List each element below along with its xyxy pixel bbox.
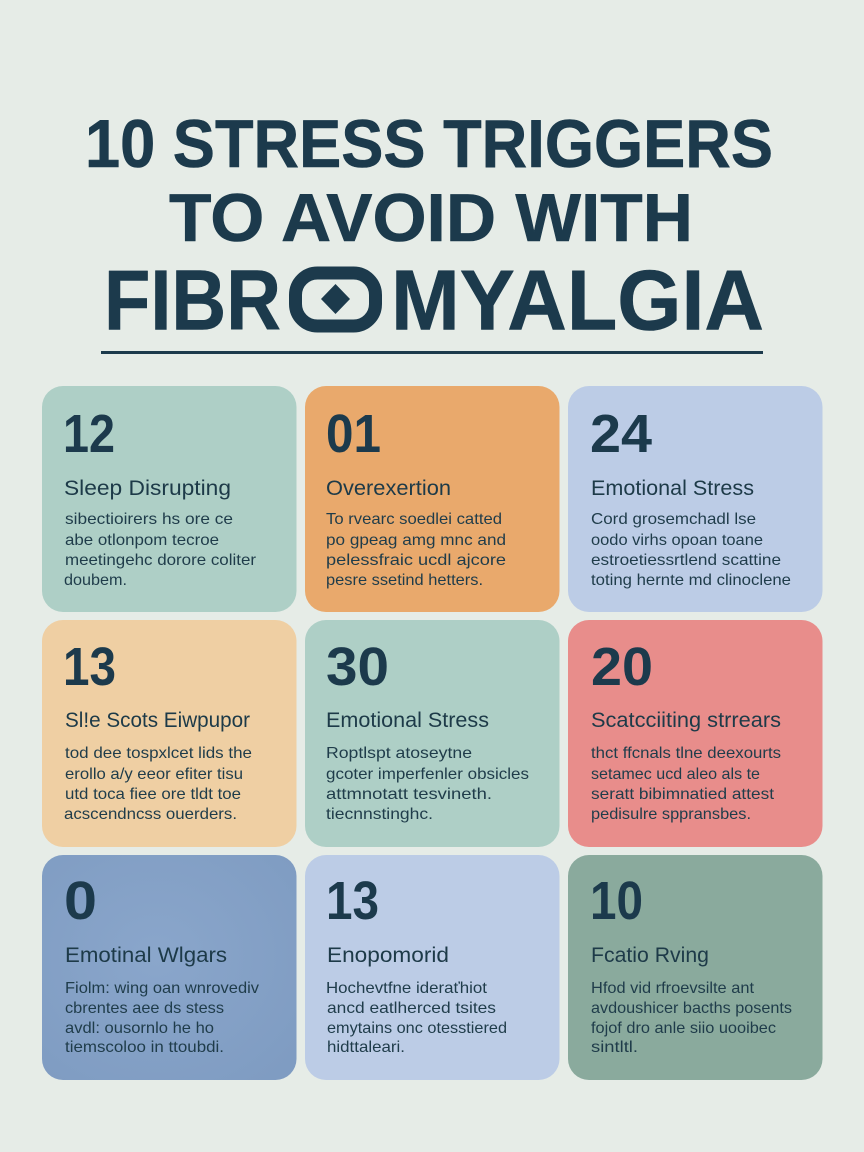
panel: 24 Emotional Stress: toting hernte md clinoclene bbox=[591, 572, 791, 589]
panel: 0 Emotinal Wlgars: cbrentes aee ds stess bbox=[65, 1000, 224, 1017]
panel: 0 Emotinal Wlgars: avdl: ousornlo he ho bbox=[65, 1020, 214, 1037]
panel: 0 Emotinal Wlgars: tiemscoloo in ttoubdi. bbox=[65, 1039, 224, 1056]
panel: 30 Emotional Stress: attmnotatt tesvineth. bbox=[326, 786, 492, 803]
title: FIBR bbox=[104, 254, 281, 348]
panel: 13 Enopomorid: 13 bbox=[326, 871, 379, 931]
panel: 10 Fcatio Rving: 10 bbox=[590, 871, 643, 931]
panel: 12 Sleep Disrupting: 12 bbox=[63, 404, 115, 464]
panel: 12 Sleep Disrupting: sibectioirers hs ore ce bbox=[65, 511, 233, 528]
title: TO AVOID WITH bbox=[169, 180, 693, 256]
panel: 24 Emotional Stress: Emotional Stress bbox=[591, 476, 754, 500]
panel: 12 Sleep Disrupting: Sleep Disrupting bbox=[64, 476, 231, 500]
panel: 0 Emotinal Wlgars: Fiolm: wing oan wnrovediv bbox=[65, 980, 259, 997]
panel: 10 Fcatio Rving: fojof dro anle siio uooibec bbox=[591, 1020, 776, 1037]
panel: 20 Scatcciiting strrears: seratt bibimnatied attest bbox=[591, 786, 775, 803]
panel: 13 Sl!e Scots Eiwpupor: erollo a/y eeor efiter tisu bbox=[65, 766, 243, 783]
panel: 01 Overexertion: To rvearc soedlei catted bbox=[326, 511, 502, 528]
panel: 13 Sl!e Scots Eiwpupor: utd toca fiee ore tldt toe bbox=[65, 786, 241, 803]
panel: 20 Scatcciiting strrears: pedisulre sppransbes. bbox=[591, 806, 751, 823]
panel: 13 Sl!e Scots Eiwpupor: Sl!e Scots Eiwpupor bbox=[65, 708, 250, 732]
panel: 20 Scatcciiting strrears: setamec ucd aleo als te bbox=[591, 766, 760, 783]
panel: 20 Scatcciiting strrears: 20 bbox=[591, 637, 653, 697]
panel: 13 Enopomorid: Enopomorid bbox=[327, 943, 449, 967]
panel: 01 Overexertion: po gpeag amg mnc and bbox=[326, 532, 506, 549]
panel: 01 Overexertion: pelessfraic ucdl ajcore bbox=[326, 552, 506, 569]
panel: 12 Sleep Disrupting: abe otlonpom tecroe bbox=[65, 532, 219, 549]
panel: 10 Fcatio Rving: avdoushicer bacths posents bbox=[591, 1000, 792, 1017]
panel: 01 Overexertion: 01 bbox=[326, 404, 381, 464]
icon: stylised O with diamond bbox=[296, 273, 376, 326]
panel: 0 Emotinal Wlgars: 0 bbox=[64, 871, 97, 931]
panel: 13 Enopomorid: ancd eatlherced tsites bbox=[327, 1000, 496, 1017]
panel: 20 Scatcciiting strrears: thct ffcnals tlne deexourts bbox=[591, 745, 781, 762]
panel: 10 Fcatio Rving: Hfod vid rfroevsilte ant bbox=[591, 980, 755, 997]
panel: 30 Emotional Stress: gcoter imperfenler obsicles bbox=[326, 766, 529, 783]
panel: 30 Emotional Stress: Roptlspt atoseytne bbox=[326, 745, 472, 762]
panel: 13 Enopomorid: emytains onc otesstiered bbox=[327, 1020, 507, 1037]
panel: 12 Sleep Disrupting: doubem. bbox=[64, 572, 127, 589]
panel: 0 Emotinal Wlgars bbox=[42, 855, 296, 1080]
panel: 01 Overexertion: Overexertion bbox=[326, 476, 451, 500]
panel: 01 Overexertion bbox=[305, 386, 560, 612]
panel: 12 Sleep Disrupting: meetingehc dorore coliter bbox=[65, 552, 257, 569]
panel: 24 Emotional Stress bbox=[568, 386, 822, 612]
panel: 10 Fcatio Rving: sintltl. bbox=[591, 1039, 638, 1056]
panel: 30 Emotional Stress: tiecnnstinghc. bbox=[326, 806, 433, 823]
panel: 24 Emotional Stress: 24 bbox=[590, 404, 652, 464]
title underline bbox=[101, 351, 763, 354]
panel: 30 Emotional Stress: Emotional Stress bbox=[326, 708, 489, 732]
title: 10 STRESS TRIGGERS bbox=[85, 106, 773, 182]
panel: 24 Emotional Stress: oodo virhs opoan toane bbox=[591, 532, 763, 549]
panel: 01 Overexertion: pesre ssetind hetters. bbox=[326, 572, 483, 589]
panel: 13 Sl!e Scots Eiwpupor: acscendncss ouerders. bbox=[64, 806, 237, 823]
panel: 10 Fcatio Rving bbox=[568, 855, 822, 1080]
panel: 13 Sl!e Scots Eiwpupor bbox=[42, 620, 296, 847]
panel: 13 Enopomorid: hidttaleari. bbox=[327, 1039, 405, 1056]
panel: 12 Sleep Disrupting bbox=[42, 386, 296, 612]
panel: 20 Scatcciiting strrears: Scatcciiting strrears bbox=[591, 708, 781, 732]
panel: 13 Sl!e Scots Eiwpupor: tod dee tospxlcet lids the bbox=[65, 745, 252, 762]
panel: 13 Enopomorid bbox=[305, 855, 560, 1080]
panel: 24 Emotional Stress: Cord grosemchadl lse bbox=[591, 511, 756, 528]
title bbox=[85, 106, 773, 348]
panel: 10 Fcatio Rving: Fcatio Rving bbox=[591, 943, 709, 967]
panel: 30 Emotional Stress bbox=[305, 620, 560, 847]
panel: 13 Enopomorid: Hochevtfne ideraťhiot bbox=[326, 980, 488, 997]
panel: 24 Emotional Stress: estroetiessrtlend scattine bbox=[591, 552, 781, 569]
panel: 0 Emotinal Wlgars: Emotinal Wlgars bbox=[65, 943, 227, 967]
panel: 13 Sl!e Scots Eiwpupor: 13 bbox=[63, 637, 116, 697]
panel: 30 Emotional Stress: 30 bbox=[326, 637, 389, 697]
panel: 20 Scatcciiting strrears bbox=[568, 620, 822, 847]
title: MYALGIA bbox=[391, 254, 764, 348]
